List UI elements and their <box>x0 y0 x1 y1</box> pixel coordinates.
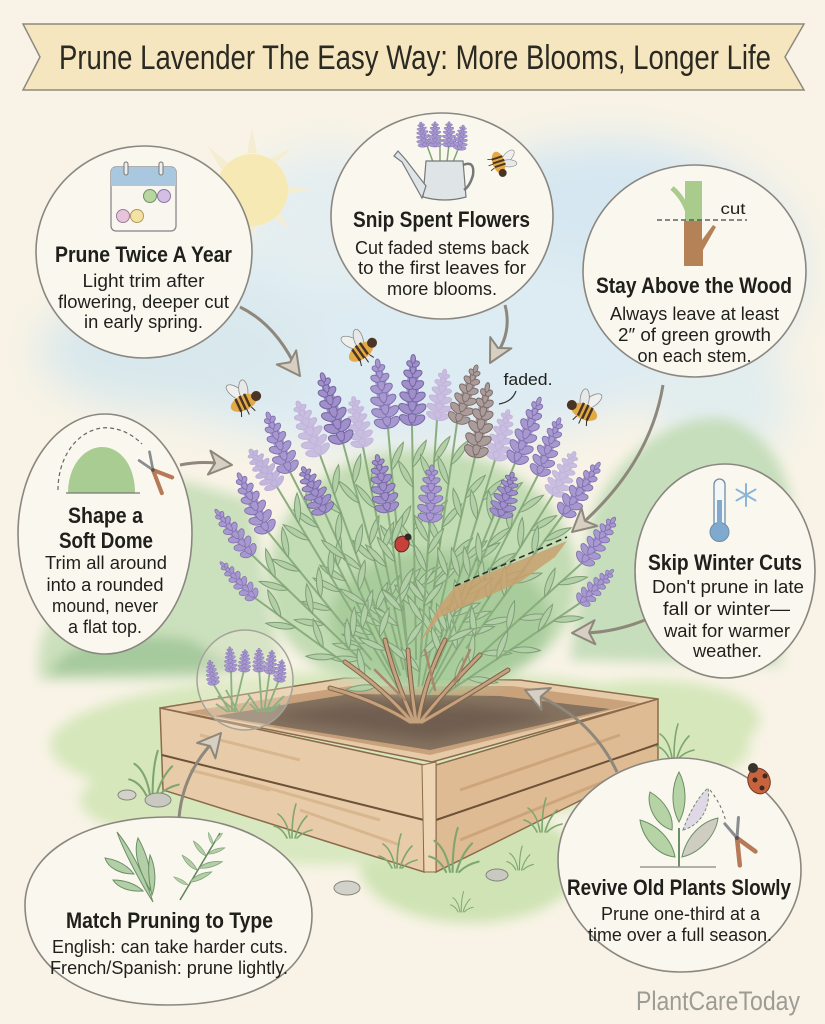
panel: Shape a Soft Dome: Shape a <box>68 503 144 528</box>
panel: Shape a Soft Dome: Trim all around <box>45 552 167 573</box>
panel: Stay Above the Wood: on each stem. <box>638 345 752 366</box>
panel: Snip Spent Flowers: more blooms. <box>387 278 497 299</box>
panel: Stay Above the Wood: 2″ of green growth <box>618 324 771 345</box>
panel: Revive Old Plants Slowly: time over a full season. <box>588 924 772 945</box>
panel: Prune Twice A Year: Light trim after <box>82 270 204 291</box>
panel: Prune Twice A Year: in early spring. <box>84 311 203 332</box>
watercolor sky wash <box>40 140 800 460</box>
panel: Revive Old Plants Slowly <box>558 758 801 972</box>
grass tufts and stones <box>118 724 694 912</box>
leafy stems <box>236 418 597 714</box>
icon: feathery French leaf <box>173 832 225 900</box>
bee: right <box>561 381 607 430</box>
bee: centre <box>335 320 384 370</box>
background hedges <box>38 418 793 680</box>
lawn <box>50 670 760 923</box>
arrow: Revive to soil <box>520 679 617 772</box>
bed left face <box>160 708 424 872</box>
icon: thermometer <box>710 479 729 542</box>
icon: bee <box>485 146 522 180</box>
bed right face <box>436 699 658 872</box>
icon: narrow English leaves <box>105 832 155 902</box>
panel: Snip Spent Flowers: Cut faded stems back <box>355 237 530 258</box>
panel: Snip Spent Flowers: Snip Spent Flowers <box>353 207 530 232</box>
panel: Match Pruning to Type: Match Pruning to Type <box>66 908 273 933</box>
raised wooden bed <box>160 678 658 872</box>
panel: Shape a Soft Dome: into a rounded <box>46 574 164 595</box>
arrow: Stay Above the Wood to cut line <box>564 385 663 541</box>
arrow: Prune Twice to plant <box>240 307 310 383</box>
panel: Skip Winter Cuts: weather. <box>692 640 762 661</box>
icon: watering can with lavender <box>394 121 473 200</box>
icon: ladybug on plant <box>393 534 412 554</box>
panel: Match Pruning to Type: English: can take harder cuts. <box>52 936 288 957</box>
panel: Stay Above the Wood <box>583 165 806 377</box>
title banner <box>23 24 804 90</box>
panel: Stay Above the Wood: Always leave at least <box>610 303 779 324</box>
panel: Shape a Soft Dome <box>18 414 192 654</box>
woody stems <box>330 640 508 722</box>
icon: shears <box>721 817 758 865</box>
shaped cut line <box>420 537 567 642</box>
panel: Stay Above the Wood: Stay Above the Wood <box>596 273 792 298</box>
panel: Prune Twice A Year <box>36 146 252 358</box>
flower spikes <box>206 354 626 612</box>
panel: Prune Twice A Year: flowering, deeper cut <box>58 291 229 312</box>
bed top and soil <box>160 678 658 762</box>
panel: Skip Winter Cuts: wait for warmer <box>663 620 790 641</box>
lavender plant <box>206 354 626 722</box>
icon: stem with cut line: cut <box>720 201 746 218</box>
arrow: Snip to faded flowers <box>479 305 511 369</box>
icon: dome and shears <box>58 428 176 493</box>
panel: Skip Winter Cuts: fall or winter— <box>663 598 791 619</box>
icon: stem with cut line <box>657 181 747 266</box>
watermark: PlantCareToday <box>636 986 800 1016</box>
icon: snowflake <box>736 484 756 506</box>
icon: calendar <box>111 162 176 231</box>
bed corner post <box>422 762 436 872</box>
panel: Match Pruning to Type: French/Spanish: prune lightly. <box>50 957 288 978</box>
panel: Shape a Soft Dome: Soft Dome <box>59 528 153 553</box>
panel: Revive Old Plants Slowly: Revive Old Plants Slowly <box>567 875 792 900</box>
arrow: Skip Winter Cuts to plant <box>572 620 645 645</box>
faded label: faded. <box>504 370 552 389</box>
panel: Skip Winter Cuts <box>635 464 815 678</box>
foliage wash <box>268 450 576 691</box>
panel: Revive Old Plants Slowly: Prune one-third at a <box>601 903 761 924</box>
panel: Skip Winter Cuts: Don't prune in late <box>652 576 804 597</box>
panel: Shape a Soft Dome: a flat top. <box>68 616 142 637</box>
arrow: Match Pruning to inset <box>179 725 230 818</box>
panel: Snip Spent Flowers: to the first leaves for <box>358 257 526 278</box>
bee: left <box>221 372 267 421</box>
panel: Snip Spent Flowers <box>331 113 553 319</box>
icon: ladybug <box>744 763 774 797</box>
icon: sun <box>208 128 312 240</box>
panel: Prune Twice A Year: Prune Twice A Year <box>55 242 232 267</box>
panel: Skip Winter Cuts: Skip Winter Cuts <box>648 550 802 575</box>
panel: Match Pruning to Type <box>25 817 312 1005</box>
arrow: Shape a Soft Dome to plant <box>180 451 233 477</box>
panel: Shape a Soft Dome: mound, never <box>52 595 158 616</box>
small lavender inset <box>197 630 293 730</box>
icon: plant being cut <box>640 772 726 867</box>
faded label <box>499 370 552 404</box>
